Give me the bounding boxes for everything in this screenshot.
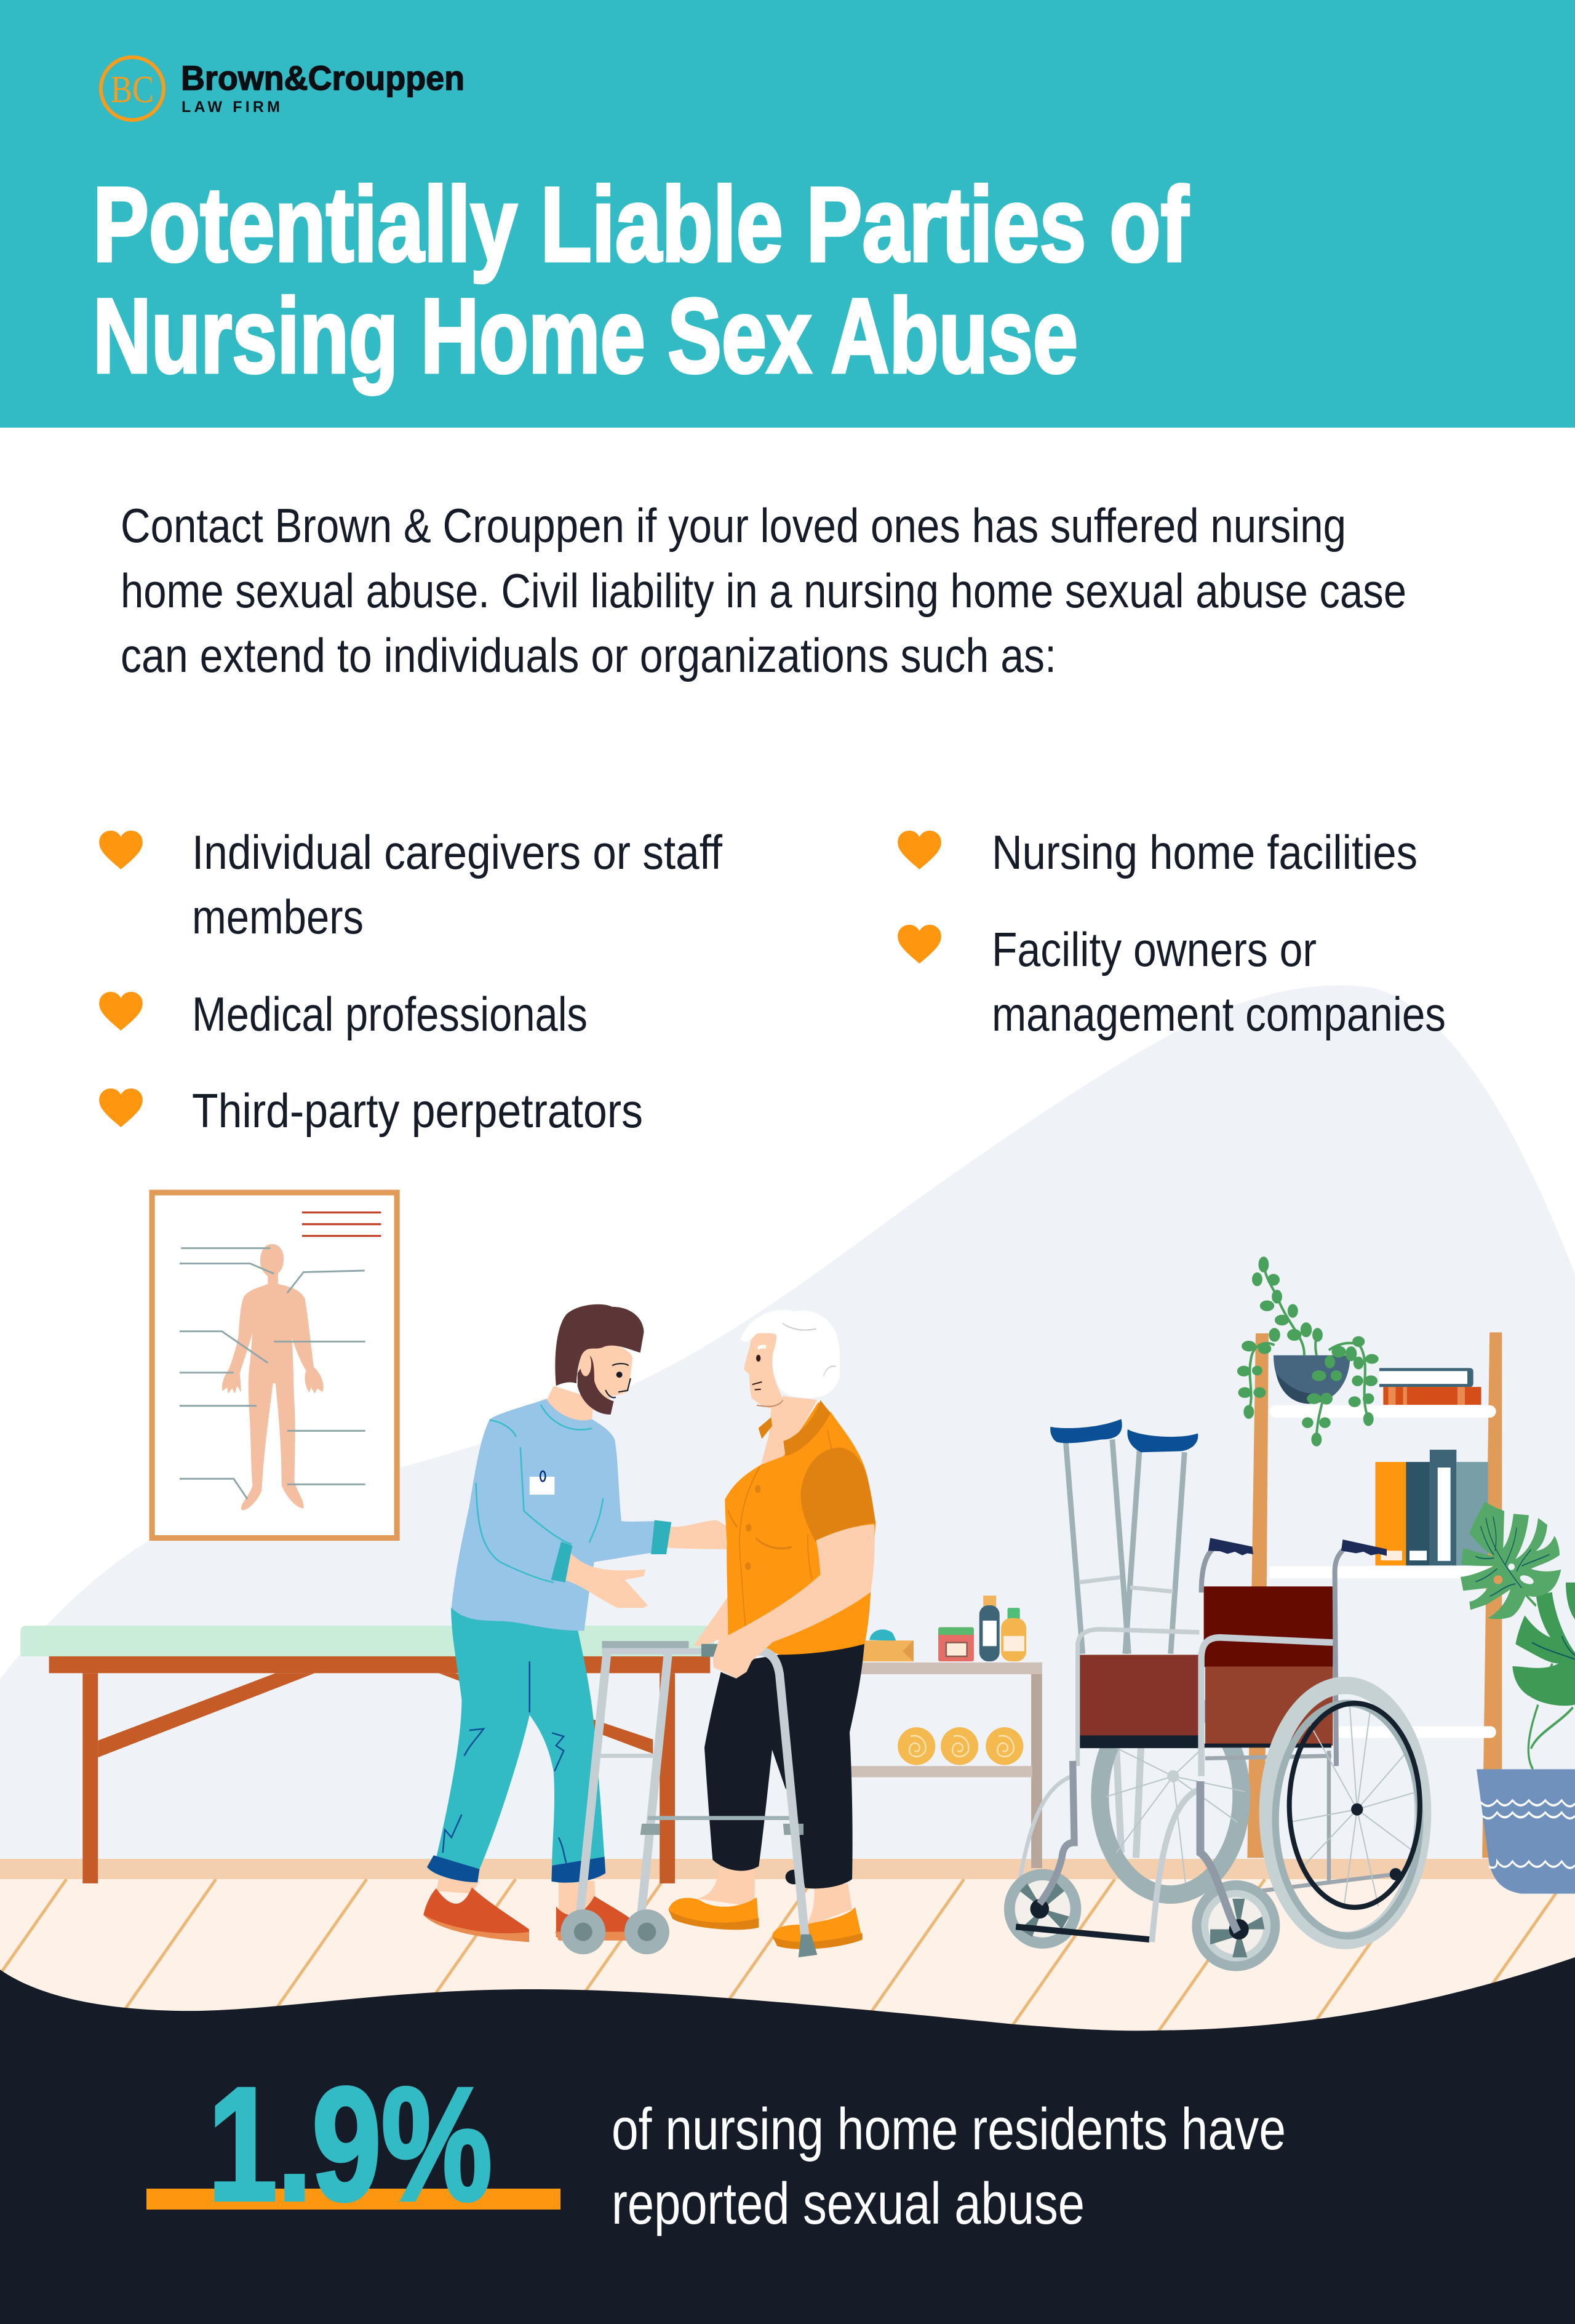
- big wheel: [1267, 1685, 1423, 1941]
- icon: heart bullet 1: [99, 831, 143, 869]
- list item: individual caregivers: members: [192, 890, 364, 944]
- list item: facility owners: [992, 922, 1446, 1041]
- logo: Brown & Crouppen: LAW FIRM: [181, 98, 280, 116]
- list: liable parties left column: [99, 825, 722, 1138]
- shirt: [725, 1400, 875, 1655]
- handle grips: [1208, 1538, 1253, 1555]
- list item: facility owners: Facility owners or: [992, 922, 1317, 976]
- books: middle shelf: [1376, 1450, 1488, 1565]
- list item: facility owners: management companies: [992, 987, 1446, 1041]
- text block: statistic caption: [612, 2096, 1286, 2237]
- baseboard: [0, 1859, 1575, 1879]
- left caster: [1004, 1869, 1081, 1949]
- soap box: [861, 1629, 914, 1661]
- cream jar: [938, 1627, 974, 1661]
- list item: nursing home facilities: Nursing home facilities: [992, 825, 1418, 879]
- rolled towels: [898, 1727, 1023, 1765]
- yellow bottle: [1001, 1608, 1026, 1661]
- side table with supplies: [849, 1595, 1042, 1868]
- back arm: [693, 1597, 728, 1646]
- caregiver man: [423, 1304, 727, 1942]
- backrest and seat: [1079, 1586, 1333, 1748]
- pot: [1477, 1769, 1575, 1894]
- title: [93, 166, 1189, 395]
- list item: individual caregivers: [192, 825, 722, 944]
- stems: [1526, 1595, 1573, 1769]
- massage table: [20, 1626, 714, 1883]
- icon: heart bullet 5: [898, 925, 941, 964]
- monstera plant in blue pot: [1461, 1501, 1575, 1894]
- icon: heart bullet 4: [898, 831, 941, 869]
- lower leaf: [1512, 1592, 1575, 1706]
- icon: heart bullet 2: [99, 992, 143, 1031]
- panel: dark footer wave: [0, 1957, 1575, 2324]
- white hair: [740, 1310, 840, 1398]
- crutches: [1050, 1419, 1198, 1858]
- plant: hanging vine in pot: [1238, 1257, 1378, 1445]
- frame: [1013, 1549, 1395, 1930]
- lower hand: [551, 1541, 648, 1608]
- text block: introduction: home sexual abuse. Civil liability in a nursing home sexual abuse case: [121, 564, 1406, 618]
- neck and face: [547, 1304, 644, 1420]
- text block: introduction: can extend to individuals or organizations such as:: [121, 628, 1056, 682]
- wheelchair: [1004, 1538, 1423, 1971]
- sweater: [452, 1399, 671, 1631]
- logo: Brown & Crouppen: [101, 57, 465, 120]
- panel: header band: [0, 0, 1575, 428]
- text block: statistic caption: of nursing home residents have: [612, 2096, 1286, 2162]
- face: [744, 1333, 783, 1409]
- pants: [427, 1608, 605, 1883]
- upper hand: [667, 1520, 727, 1549]
- neck: [761, 1396, 817, 1465]
- rear wheel: [1100, 1699, 1245, 1895]
- list item: third-party perpetrators: Third-party perpetrators: [192, 1084, 643, 1138]
- shoes: [669, 1898, 759, 1929]
- books: top shelf: [1379, 1368, 1481, 1405]
- panel: illustration background wall shape: [0, 985, 1575, 1907]
- legs skin: [436, 1879, 597, 1914]
- bookshelf: [1238, 1257, 1502, 1858]
- trousers: [704, 1644, 864, 1888]
- footrest and forks: [1016, 1761, 1237, 1942]
- title: Potentially Liable Parties of: [93, 166, 1189, 284]
- shoes: [423, 1888, 632, 1942]
- dark bottle: [979, 1595, 1000, 1661]
- woman's hand on walker: [701, 1524, 875, 1679]
- anatomy poster: [152, 1192, 397, 1538]
- logo: Brown & Crouppen: BC: [111, 69, 154, 111]
- list item: individual caregivers: Individual caregivers or staff: [192, 825, 722, 879]
- text block: introduction: Contact Brown & Crouppen if your loved ones has suffered nursing: [121, 498, 1346, 553]
- right caster: [1192, 1880, 1280, 1971]
- legs: [697, 1869, 755, 1905]
- icon: heart bullet 3: [99, 1088, 143, 1127]
- floor: [0, 1879, 1575, 2064]
- list item: medical professionals: Medical professionals: [192, 987, 588, 1041]
- upper leaf: [1461, 1501, 1561, 1619]
- statistic: 1.9%: 1.9%: [208, 2054, 492, 2234]
- logo: Brown & Crouppen: Brown&Crouppen: [181, 58, 465, 97]
- text block: introduction: [121, 498, 1406, 682]
- text block: statistic caption: reported sexual abuse: [612, 2171, 1085, 2237]
- walker: [560, 1645, 817, 1957]
- elderly woman: [669, 1310, 875, 1949]
- list: liable parties right column: [898, 825, 1446, 1041]
- title: Nursing Home Sex Abuse: [93, 277, 1078, 395]
- rear walker wheel: [786, 1870, 802, 1884]
